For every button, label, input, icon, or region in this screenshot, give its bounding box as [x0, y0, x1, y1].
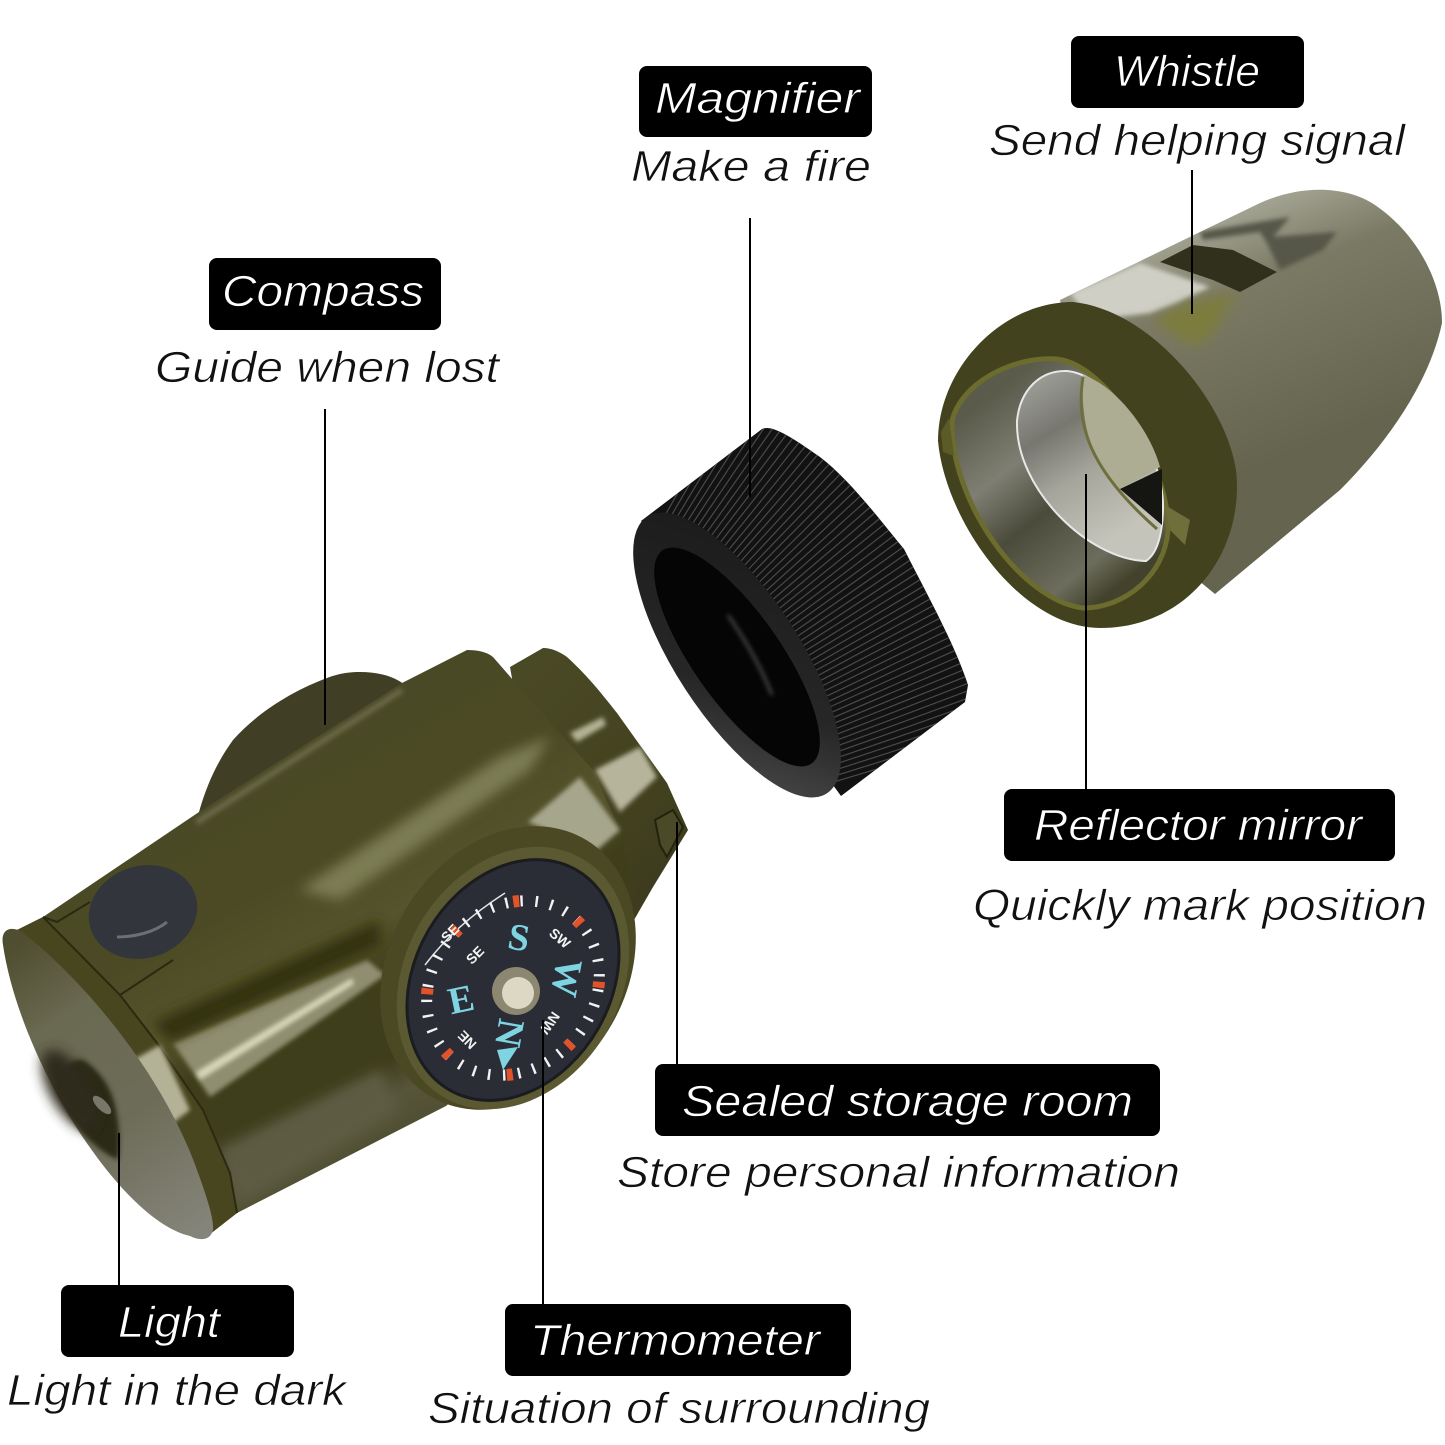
dial reflection arc — [425, 893, 505, 965]
tab right — [1165, 505, 1190, 545]
lower pale body — [217, 1070, 400, 1205]
callout: sealed storage room — [617, 1064, 1180, 1197]
callout: magnifier — [631, 66, 872, 191]
mirror dark patch — [1120, 469, 1162, 525]
callout: magnifier: Make a fire — [631, 142, 871, 191]
photo: whistle head — [938, 190, 1442, 628]
hole rim shade — [30, 1041, 110, 1139]
neck highlights — [528, 717, 657, 850]
callout: reflector mirror: Quickly mark position — [973, 881, 1427, 930]
callout: thermometer: Thermometer — [530, 1316, 823, 1365]
intercardinal SE inner: SE — [463, 943, 487, 967]
callout: magnifier: Magnifier — [655, 74, 863, 123]
inner yellow ring — [952, 359, 1168, 608]
north triangle — [497, 1047, 518, 1070]
ring band behind cap — [17, 917, 237, 1238]
top edge sheen — [195, 688, 404, 825]
photo: knurled ring — [633, 428, 968, 798]
white streak — [196, 978, 354, 1080]
callout: sealed storage room: Sealed storage room — [682, 1077, 1133, 1126]
mirror pale area — [1083, 375, 1160, 489]
callout: light: Light — [118, 1298, 222, 1347]
ring hole — [626, 525, 848, 789]
intercardinal NE: NE — [454, 1027, 480, 1053]
leader line: whistle — [1191, 170, 1193, 314]
callout: whistle: Whistle — [1114, 47, 1260, 96]
boss rim — [350, 804, 676, 1152]
mirror olive arc — [1081, 377, 1157, 529]
leader line: magnifier — [749, 218, 751, 497]
yellow reflection — [1153, 293, 1237, 347]
leader line: sealed storage room — [676, 822, 678, 1065]
light bulb glint — [90, 1093, 114, 1117]
compass — [365, 821, 661, 1139]
callout: light: Light in the dark — [7, 1366, 348, 1415]
cardinal W: W — [542, 955, 590, 1000]
tab left — [941, 418, 954, 456]
callout: compass: Compass — [222, 267, 424, 316]
knurling — [690, 470, 910, 760]
orange ticks — [391, 865, 635, 1111]
white reflection near rim — [1070, 263, 1210, 320]
rim outer — [938, 302, 1237, 628]
upper dark band — [153, 920, 380, 1042]
cylinder body — [17, 650, 634, 1238]
callout: thermometer: Situation of surrounding — [428, 1384, 931, 1433]
cardinal S: S — [505, 915, 533, 961]
neck barrel — [510, 648, 688, 920]
light hole — [55, 1060, 119, 1160]
cardinal N: N — [486, 1016, 532, 1050]
reflector lens — [1017, 371, 1163, 561]
cardinal E: E — [444, 977, 478, 1023]
intercardinal NW: NW — [536, 1009, 563, 1038]
band reflection — [133, 1045, 190, 1125]
callout: reflector mirror — [973, 789, 1427, 930]
compass dial — [365, 821, 661, 1139]
photo: main whistle body — [3, 648, 688, 1239]
callout: compass — [155, 258, 501, 392]
callout: whistle — [989, 36, 1406, 165]
callout: thermometer — [428, 1304, 931, 1433]
intercardinal SE outer: SE — [438, 921, 462, 945]
callout: compass: Guide when lost — [155, 343, 501, 392]
main reflection band — [173, 960, 385, 1097]
leader line: compass — [324, 409, 326, 725]
latch on neck — [655, 810, 683, 857]
callout: reflector mirror: Reflector mirror — [1034, 801, 1365, 850]
hole reflection — [728, 615, 772, 695]
leader line: light — [118, 1133, 120, 1286]
callout: light — [7, 1285, 348, 1415]
seam lines — [43, 902, 237, 1213]
compass boss — [328, 778, 688, 1158]
white ticks — [391, 865, 635, 1111]
ring front face — [595, 483, 879, 827]
intercardinal SW: SW — [546, 925, 574, 952]
top dark reflection — [1200, 217, 1337, 270]
callout: sealed storage room: Store personal information — [617, 1148, 1180, 1197]
leader line: thermometer — [542, 1020, 544, 1305]
compass pivot — [492, 967, 540, 1015]
power button — [76, 851, 210, 973]
compass back disc — [199, 672, 405, 830]
leader line: reflector mirror — [1085, 474, 1087, 790]
cap face — [3, 929, 213, 1239]
whistle slot — [1160, 245, 1277, 292]
body highlights — [153, 688, 550, 1205]
callout: whistle: Send helping signal — [989, 116, 1406, 165]
shoulder stripe — [300, 737, 550, 900]
